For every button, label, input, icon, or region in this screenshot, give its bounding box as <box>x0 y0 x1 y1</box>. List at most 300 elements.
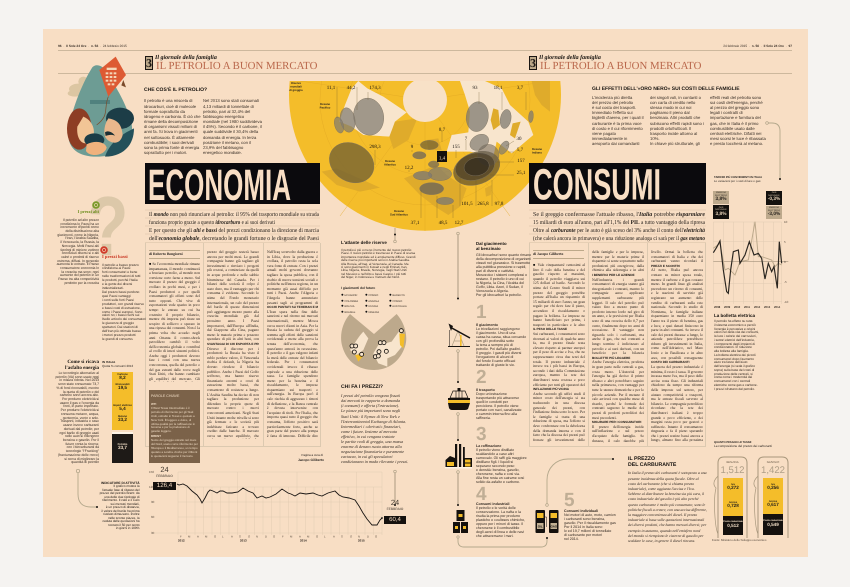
article column 2: consumi <box>592 250 644 444</box>
text: chi fa i prezzi: l'Intercontinental Exchange di Atlanta. <box>341 419 406 424</box>
text: il giacimento <box>476 323 526 367</box>
kicker: Il giornale della famiglia <box>539 55 601 61</box>
segment excise <box>723 495 743 516</box>
text: il prezzo del carburante: del mondo si riempiono le cisterne di gasolio per <box>628 534 704 538</box>
text: la bolletta elettrica: condizionatori. In riduzione <box>714 345 752 349</box>
text: chi fa i prezzi: cartacea, in cui gli speculatori <box>341 454 393 459</box>
segment: petrolio: 33,7 <box>118 445 127 450</box>
header: page line right: 24 febbraio 2015 · n. 56 · Il Sole 24 Ore · 97 <box>723 44 792 48</box>
segment tax iva: 0,272 <box>727 485 739 490</box>
text: la bolletta elettrica: dell'energia (si veda il grafico <box>714 364 755 368</box>
text: che cos'è il petrolio col 1: idrogeno e carbonio. È ciò che <box>144 114 201 119</box>
icon: fuel pumps: GAS <box>550 524 557 528</box>
legend column 2 <box>365 293 379 315</box>
chart x axis labels <box>180 534 377 538</box>
heading: come si ricava l'asfalto energia <box>65 360 99 371</box>
chart y axis labels <box>149 470 155 535</box>
text: effetti col 1: di costo e il cui rifornimento <box>592 126 643 131</box>
text: il giacimento: l'erogazione di alcuni di <box>476 355 513 359</box>
map values: 11,1 <box>327 85 336 91</box>
text prezzi bassi: le grandi di consumo. <box>102 337 133 341</box>
text: che cos'è il petrolio col 2 <box>203 98 262 155</box>
text: intro: pari di diversi e cattività. <box>476 269 514 273</box>
text: effetti col 1: è sul costo dei trasporti. <box>592 105 636 110</box>
ocean labels: Riserve <box>291 81 301 85</box>
note: indicatore di attività: INDICATORE DI ATTIVITÀ <box>101 480 140 484</box>
text: che cos'è il petrolio col 2: mondiale (nel 1980 suddivideva <box>203 119 262 124</box>
curved connector: barrels to pumps <box>455 533 551 550</box>
heading: tariffe più convenienti: Le variazioni per i costi di luce e gas <box>714 179 760 183</box>
text: come si ricava: consuma metano, acqua, <box>61 412 99 416</box>
heading: il prezzo del carburante: DEL CARBURANTE <box>628 462 676 468</box>
text prezzi alti: conosciuti diversi si e alti <box>62 251 99 255</box>
credits: Pagina a cura di <box>301 453 323 457</box>
heading: dal giacimento al benzinaio: al benzinaio <box>476 246 501 251</box>
text prezzi alti: Il petrolio ad alto prezzo <box>63 218 99 222</box>
fuel name: GASOLIO <box>767 460 779 464</box>
yellow semicircle <box>289 81 561 231</box>
map values: 44,2 <box>347 85 356 91</box>
text: la bolletta elettrica: La bolletta elettrica dei piccoli <box>714 353 756 357</box>
fuel price panel: benzina <box>712 456 748 540</box>
text: come si ricava: si cerca di migliorare la <box>64 457 99 461</box>
text: chi fa i prezzi: Le piazze più importanti sono negli <box>341 408 400 413</box>
badge: gas Italia: GAS <box>719 206 723 208</box>
text: atlante delle riserve <box>341 248 416 279</box>
map values: 30 <box>516 136 522 142</box>
map values: 174,3 <box>369 85 381 91</box>
text prezzi bassi: e bassi costi di estrazione, <box>102 306 141 310</box>
note: indicatore di attività: toccato il 50 per cento <box>108 522 140 526</box>
chart y axis labels: 90 <box>151 500 155 504</box>
text prezzi alti: aumenta le entrate. Il Paese <box>57 262 99 266</box>
text: la raffinazione: Alla fine resta un catrame così <box>476 476 524 480</box>
text: che cos'è il petrolio col 2: petrolio, pari al 32,4% del <box>203 109 250 114</box>
badge: gas Italia: NATURALE <box>715 209 727 211</box>
text: che cos'è il petrolio col 1: di organismi vissuti milioni di <box>144 124 197 129</box>
ocean labels: mondiali <box>290 84 302 88</box>
heading: quanto pesano le tasse: La composizione del prezzo dei carburanti <box>714 444 772 448</box>
map values: 8,7 <box>439 127 446 133</box>
text: consumi industriali: conservazione. La nafta e la <box>476 510 521 514</box>
map values: 18,1 <box>494 85 503 91</box>
map values: 155 <box>452 144 460 150</box>
text: consumi individuali: Consumi individuali <box>564 509 598 513</box>
numeral 5: 5 <box>564 490 575 511</box>
legend column 2: ● ANGOLA <box>365 298 379 302</box>
chart x axis labels: D <box>265 534 267 538</box>
text: la bolletta elettrica: Il petrolio ha effetto su tutta <box>714 319 752 323</box>
chart x axis labels: A <box>333 534 335 538</box>
side note: prezzi alti and question mark <box>56 191 128 285</box>
line chart: tariffe luce e gas <box>708 218 793 312</box>
segment tax iva: Iva <box>731 483 735 486</box>
axis x labels: 2014 <box>774 305 781 309</box>
article column 2: consumi: MISURARE PER I CONSUMATORI <box>592 420 641 424</box>
text: la bolletta elettrica: I prezzi sfruttano dal petrolio. <box>714 386 755 390</box>
text: atlante delle riserve: ci sono giacimenti in Kuwait e negli Emirati, Iran, <box>341 265 407 269</box>
kicker: Il giornale della famiglia <box>155 55 217 61</box>
text: la bolletta elettrica: elettriche come gas e carbone. <box>714 383 758 387</box>
text prezzi alti: Paese tra alta competitività <box>58 277 99 281</box>
chart: consumi Italia stacked bar <box>102 360 133 463</box>
badge: gas Europa: -0,3% <box>768 197 780 202</box>
segment: import elettrico <box>113 404 132 411</box>
text: effetti col 2 <box>650 95 704 146</box>
numeral 1: 1 <box>476 302 487 323</box>
text: effetti col 3: al prezzo del greggio sono <box>710 105 759 110</box>
total price: 1,422 <box>761 465 785 476</box>
text: la raffinazione: La raffinazione <box>476 444 501 448</box>
chart x axis labels: M <box>188 534 191 538</box>
text: chi fa i prezzi: negoziazione finanziaria e puramente <box>341 449 404 454</box>
text: come si ricava: la quota di petrolio e del <box>63 390 99 394</box>
text: effetti col 1: aeroporto dai comandanti <box>592 141 640 146</box>
text: il prezzo del carburante: politiche fiscali a creare, con una accisa differente, <box>628 508 707 512</box>
chart y axis labels: 150 <box>149 470 154 474</box>
text: chi fa i prezzi: (i consumi) e offerta (l'estrazione). <box>341 403 399 408</box>
header: page line left: 96 · Il Sole 24 Ore · n. 56 · 24 febbraio 2015 <box>58 44 127 48</box>
fuel price panel: gasolio <box>752 456 789 540</box>
map values: 157 <box>517 158 525 164</box>
legend column 2: ● NIGERIA <box>365 308 379 314</box>
text: consumi individuali: Nei motori di auto, moto, camion <box>564 513 616 517</box>
world map of oil reserves <box>289 81 561 231</box>
axis x labels: 2009 <box>724 305 731 309</box>
axis y labels: -5 <box>784 280 787 284</box>
note: indicatore di attività: caduta delle quotazioni ha <box>102 519 140 523</box>
text: la bolletta elettrica: valori nel della vita dei consumi, <box>714 330 759 334</box>
legend column 1: ● ECUADOR <box>341 292 357 297</box>
lead paragraph: consumi: Oltre al carburante per le auto è già sceso del 3% anche il conto dell'elettricità <box>533 227 705 234</box>
text: chi fa i prezzi: Stati Uniti: il Nymex di New York e <box>341 414 400 418</box>
text: intro <box>476 252 531 297</box>
text: la raffinazione: e densità: benzina, gasolio, <box>476 468 520 472</box>
segment industrial price <box>723 516 743 535</box>
chart x axis labels: S <box>341 534 343 538</box>
text: consumi individuali: Per il 2014 in Italia sono <box>564 525 602 529</box>
heading: dal giacimento al benzinaio <box>476 241 507 251</box>
ocean labels: Atlantico <box>384 162 396 166</box>
heading: atlante delle riserve: L'atlante delle riserve <box>341 240 387 245</box>
chart y axis labels: 30 <box>151 531 155 535</box>
text: il giacimento: petrolio. Poi dall'alto gradini. <box>476 347 521 351</box>
article column 1: consumi: IL PESO DELLE TASSE <box>533 327 567 331</box>
text: la bolletta elettrica: consumatori con i centrali <box>714 379 750 383</box>
text: il prezzo del carburante: In Italia il prezzo dei carburanti è sottoposto a una <box>628 471 707 475</box>
badge: gas Europa: NATURALE <box>768 195 780 197</box>
segment: import elettrico: 5,4 <box>119 406 126 411</box>
text: consumi industriali: degli aerei di linea e delle navi <box>476 530 524 534</box>
icon: tanker ship <box>447 387 471 411</box>
text: consumi industriali: che attraversano i mari. <box>476 534 514 538</box>
legend column 1: ● BOLIVIA <box>341 303 355 308</box>
legend column 1: ● BRASILE <box>341 308 355 314</box>
article panel frame: consumi <box>529 243 706 447</box>
chart x axis labels: G <box>214 534 216 538</box>
text: effetti col 1: viene pagato <box>592 131 616 136</box>
text: effetti col 1: biglietti d'aereo, per i quali il <box>592 115 644 120</box>
text: il giacimento: la terra a sempre più di <box>476 343 513 347</box>
green marker <box>92 201 100 209</box>
segment excise: 0,617 <box>767 502 779 507</box>
text: consumi individuali: gasolio. Per il riscaldamento gas <box>564 521 616 525</box>
text: consumi individuali: nel 2014. <box>564 537 579 541</box>
text: effetti col 2: benzinaio. Altri prodotti che <box>650 115 700 120</box>
text: come si ricava: quantità di petrolio <box>71 460 99 464</box>
text: che cos'è il petrolio col 2: posizione il metano, con il <box>203 140 251 145</box>
text prezzi alti: la crescita ma sono: ogni <box>61 270 99 274</box>
heading: come si ricava l'asfalto energia: Come si ricava <box>67 360 99 365</box>
chart x axis labels: M <box>205 534 208 538</box>
text prezzi bassi: le giacenze di greggio <box>102 321 134 325</box>
chart x axis labels: A <box>197 534 199 538</box>
article column 3: consumi: COSTO DEI CARBURANTI <box>651 360 689 364</box>
ocean labels: Oceano <box>394 209 404 213</box>
text: intro: Venezuela e Algeria. <box>476 289 509 293</box>
chart grid <box>155 472 382 535</box>
chart x axis labels: M <box>290 534 293 538</box>
note: indicatore di attività: prezzo del petrolio Brent: da <box>100 491 140 495</box>
text: il prezzo del carburante: esempio in autunno, quando nell'emisfero nord <box>628 529 700 533</box>
article column 2: consumi: Anche l'energia elettrica, prodotta in gran parte nelle centrali a gas, costa meno. L'Autorità per l'energia ha già deciso il primo ribasso e altri potrebbero seguire nella primavera, con vantaggi per tutte le utenze domestiche e per le piccole aziende. Per il metano il calo arriverà con qualche mese di ritardo, perché le formule dei contratti seguono le medie dei prezzi di prodotti petroliferi dei mesi precedenti. <box>592 360 644 420</box>
price line <box>177 484 382 525</box>
highlighted Italy value: 1,4 <box>439 156 446 162</box>
key words box <box>149 390 200 463</box>
text: atlante delle riserve: nel Messico e nell'Alto e bassi Caspio. I più tutti <box>341 272 406 276</box>
heading: IL PETROLIO A BUON MERCATO <box>156 60 317 72</box>
text: la bolletta elettrica: aiuto tra fasce dell'aiuto <box>714 360 747 364</box>
text prezzi bassi: spettatori. Dai stazioni di <box>102 325 138 329</box>
axis y labels: 0 <box>784 260 786 264</box>
text: il prezzo del carburante: la maggiore convenienza del diesel. Il prezzo <box>628 513 697 517</box>
text: chi fa i prezzi <box>341 393 408 464</box>
segment tax iva <box>723 478 743 495</box>
article column 3: consumi <box>651 250 703 444</box>
segment: import elettrico: Import elettrico <box>113 404 132 407</box>
text: il giacimento: cassa ha cassa, situa cercando <box>476 335 526 339</box>
text: effetti col 1: L'incidenza più diretta <box>592 95 632 100</box>
ocean labels: Sud Atlantico <box>390 212 408 216</box>
dark line <box>713 241 782 293</box>
text prezzi bassi: forti consumatori e bene <box>102 270 137 274</box>
chart year labels: 2012 <box>178 538 185 542</box>
chart grid <box>713 222 782 304</box>
numeral 4: 4 <box>476 484 487 505</box>
chart x axis labels: A <box>299 534 301 538</box>
text: che cos'è il petrolio col 2: 23,9% del fabbisogno <box>203 145 243 150</box>
text prezzi alti: l'Iran, l'Arabia Saudita, <box>65 236 99 240</box>
text prezzi alti: della distribuzione alta <box>65 229 99 233</box>
chart x axis labels: D <box>367 534 369 538</box>
value box: 60,4 <box>389 517 401 523</box>
heading: il prezzo del carburante <box>628 456 676 468</box>
text: come si ricava: futuro conta la ricerca; <box>65 442 99 446</box>
ocean labels: Oceano <box>385 159 395 163</box>
text prezzi alti: consumatore economia lo <box>60 266 99 270</box>
icon: fuel pumps <box>534 509 560 535</box>
icon: oil pump <box>447 322 471 348</box>
text: consumi industriali: oppure per i minori di tasse. Il <box>476 522 523 526</box>
segment industrial price <box>763 514 783 535</box>
text: effetti col 3: gas, che in Italia è il primo <box>710 121 758 126</box>
note: indicatore di attività: è un prezzo di distanza, <box>106 505 140 509</box>
text: che cos'è il petrolio col 1: anni fa. Si trova in giacimenti <box>144 129 198 134</box>
text: come si ricava: (frantumazione delle rocce) <box>58 453 99 457</box>
ocean labels: di greggio <box>289 88 303 92</box>
timeline connector arrows <box>454 229 464 519</box>
map values: 7 <box>465 136 468 142</box>
yellow stack <box>112 372 133 430</box>
line chart: Brent price 2012-2015 <box>149 470 383 542</box>
lead paragraph: consumi: Se il greggio confermasse l'attuale ribasso, l'Italia potrebbe risparmiare <box>533 211 705 218</box>
segment: metano: Metano <box>118 415 127 418</box>
chart x axis labels: F <box>282 534 284 538</box>
text prezzi alti: Norvegia. Molti Paesi alti <box>62 244 99 248</box>
tan line <box>713 222 782 275</box>
ocean labels: Indiano <box>532 150 542 154</box>
legend column 3: ● AUSTRALIA <box>389 303 407 308</box>
chart year labels: 2015 <box>358 538 365 542</box>
text: il prezzo del carburante: pesante incidenza della quota fiscale. Oltre al <box>628 477 699 481</box>
credits <box>298 453 324 462</box>
heading: IL PETROLIO A BUON MERCATO <box>540 60 701 72</box>
text: il trasporto: Il trasporto <box>476 388 495 392</box>
segment excise: Accise <box>769 500 777 503</box>
text: come si ricava: fonti, in parte importate. <box>63 404 99 408</box>
note: indicatore di attività: rivelato dimezzato. Inoltre <box>103 512 140 516</box>
axis x labels: 2012 <box>754 305 761 309</box>
section number 3: 3 <box>530 56 536 70</box>
text: come si ricava: benzina e gasolio. Per il <box>63 438 99 442</box>
text: consumi individuali: i carburanti sono benzina, <box>564 517 605 521</box>
legend column 3: ● CONGO <box>389 298 402 302</box>
chart x axis labels: L <box>222 534 224 538</box>
article column 2: consumi: BOLLETTE PIÙ LEGGERE <box>592 356 630 360</box>
heading: il prezzo del carburante: IL PREZZO <box>628 456 655 462</box>
fuel name: BENZINA <box>726 460 739 464</box>
text: effetti col 2: dei singoli voli, in contanti o <box>650 95 701 100</box>
text: effetti col 3: mesi scorsi le luce è ribassata <box>710 136 766 141</box>
text: atlante delle riserve: del Niger, in Indonesia e Vietnam del Nord. <box>341 275 400 279</box>
legend column 1 <box>341 293 358 315</box>
map values: 25,1 <box>517 170 526 176</box>
text: effetti col 3: e presto toccherà al metano. <box>710 141 763 146</box>
text: chi fa i prezzi: dai mercati in rapporto a domanda <box>341 398 400 403</box>
text: che cos'è il petrolio col 2: fabbisogno energetico <box>203 114 244 119</box>
text: il prezzo del carburante: dei diversi prodotti, che hanno mercati diversi; per <box>628 523 706 527</box>
text: come si ricava: nelle auto si ottengono <box>65 434 99 438</box>
text prezzi bassi: produttori, con grandi riserve <box>102 302 144 306</box>
text: che cos'è il petrolio col 1: soprattutto per i motori. <box>144 150 187 155</box>
text: come si ricava: usano il gas e l'energia da <box>60 401 99 405</box>
small globe: future fields <box>338 310 410 372</box>
map values: 3,7 <box>517 85 524 91</box>
segment: metano: 33,2 <box>118 417 127 422</box>
text prezzi alti: incremento d'Iperidi come <box>60 225 99 229</box>
text prezzi alti: valori e prodotti di riserve <box>61 255 99 259</box>
article panel frame: economia <box>145 243 321 447</box>
text prezzi alti: giacimenti, come la Nigeria, <box>57 233 99 237</box>
text: effetti col 3: combustibile usato dalle <box>710 126 755 131</box>
text: come si ricava: petrolio (VA) sono usate oggi <box>56 375 99 379</box>
text: effetti col 3: effetti reali del petrolio sono <box>710 95 761 100</box>
text: che cos'è il petrolio col 2: 4,13 miliardi di tonnellate di <box>203 104 254 109</box>
segment tax iva: Iva <box>771 483 775 486</box>
segment industrial price: 0,512 <box>727 523 739 528</box>
segment: petrolio <box>118 443 128 450</box>
text: il giacimento: con gli i profondità sotto <box>476 339 514 343</box>
text: che cos'è il petrolio col 1: Il petrolio è una miscela di <box>144 98 192 103</box>
illustration: family and kite in oil drop <box>67 56 134 157</box>
map values: 265,8 <box>477 201 489 207</box>
text: il trasporto: quelli in condotti per <box>476 400 508 404</box>
arrow: map to atlante <box>393 228 397 244</box>
pump outline and hose <box>752 456 789 540</box>
badge: energia elettrica Italia: 3,8% <box>716 197 726 202</box>
date number: 24 <box>391 498 399 507</box>
text prezzi bassi: dell'Iran più ottimale basse <box>102 329 141 333</box>
text: consumi industriali: Consumi industriali <box>476 502 510 506</box>
axis x labels: 2011 <box>744 305 751 309</box>
bar heading <box>102 360 133 368</box>
WTI definition: Il West Texas Intermediate è il petrolio di riferimento per gli Stati Uniti, estratto in Texas e quotato a New York. È leggero e dolce, di ottima qualità per la raffinazione in benzina e per la produzione di gasolio leggero. <box>151 406 195 433</box>
text: atlante delle riserve: delle riserve più importanti sono in Arabia Saudita. <box>341 258 410 262</box>
chart x axis labels: L <box>324 534 326 538</box>
text: la raffinazione: separano secondo peso <box>476 464 514 468</box>
article column 2: economia <box>207 250 259 439</box>
text: come si ricava: % di fonti rinnovabili, mentre <box>56 386 99 390</box>
ocean labels <box>289 81 542 216</box>
article column 1: consumi: INFLAZIONE PIÙ VICINA <box>533 387 569 391</box>
segment: rinnovabili <box>116 383 130 390</box>
legend heading: I giacimenti del futuro <box>341 286 375 290</box>
text: consumi individuali: lo ed 19,7 milioni di tonnellate <box>564 529 611 533</box>
chart x axis labels: O <box>248 534 251 538</box>
text prezzi alti: prodotto per la crescita <box>64 281 99 285</box>
lead paragraph: consumi <box>529 210 706 243</box>
heading prezzi alti: I prezzi alti <box>78 209 99 214</box>
note: indicatore di attività: nelle scorse piazze, la <box>108 516 140 520</box>
arrow: chi fa i prezzi to chart <box>392 468 398 508</box>
segment: rinnovabili: 19,5 <box>118 385 127 390</box>
text prezzi bassi: Il petrolio a basso prezzo <box>102 262 139 266</box>
text: la bolletta elettrica: sopra) sulla base del costi di <box>714 368 754 372</box>
text: il trasporto: raffineria. <box>476 416 491 420</box>
text: il prezzo del carburante: costo industriale del gasolio è più alto perché <box>628 497 698 501</box>
text: consumi individuali: di carburante per motori <box>564 533 602 537</box>
chart x axis labels: M <box>307 534 310 538</box>
text prezzi bassi: Dal prezzo bassi perdono <box>102 290 139 294</box>
section heading right <box>529 54 701 72</box>
text: chi fa i prezzi: effettivo, in cui vengono trattate <box>341 434 395 439</box>
text prezzi alti: condiziona le Paesi ha un <box>60 222 99 226</box>
text: atlante delle riserve: Paesi. Il nuovo petrolio è trasmesso in Paesi di scarsa <box>341 251 415 255</box>
chart year labels: 2013 <box>240 538 247 542</box>
curved connector: pumps to il prezzo del carburante <box>544 456 616 508</box>
note: indicatore di attività: il valore del barile ha prima <box>101 508 140 512</box>
axis x labels <box>714 305 781 309</box>
text prezzi bassi: industrializzati. <box>102 286 124 290</box>
text prezzi bassi: quei Paesi vantaggi <box>102 294 131 298</box>
heading: che cos'è il petrolio: CHE COS'È IL PETROLIO? <box>144 87 207 93</box>
text: la bolletta elettrica: conta come i modernità dei <box>714 375 752 379</box>
badge: energia elettrica Europa: -3,0% <box>768 212 780 217</box>
segment excise <box>763 495 783 514</box>
segment tax iva: 0,256 <box>767 485 779 490</box>
text prezzi bassi: valori no; i bassi rischi sui <box>102 313 139 317</box>
reserve ellipses <box>322 96 534 205</box>
